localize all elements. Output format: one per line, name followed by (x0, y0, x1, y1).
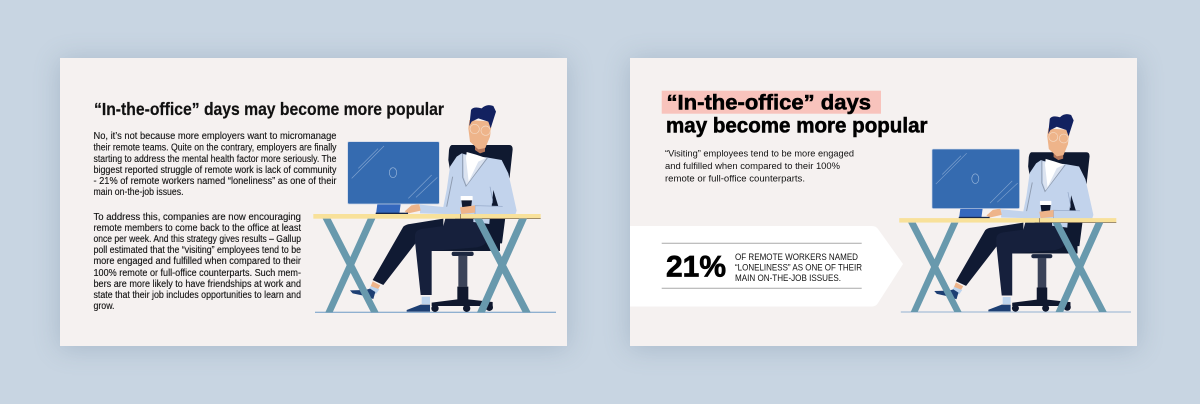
text block: and fulfilled when compared to their 100% (665, 161, 840, 172)
head (468, 105, 496, 153)
callout: 21% statistic (630, 226, 903, 306)
jacket (420, 153, 517, 224)
desk top (899, 218, 1116, 223)
heading: “In-the-office” days may become more popular (94, 99, 444, 119)
jacket (1001, 160, 1093, 228)
text block: second paragraph: poll estimated that the “visiting” employees tend to be (94, 245, 301, 256)
illustration: man at desk (899, 114, 1131, 313)
text block: second paragraph: once per week. And this strategy gives results – Gallup (94, 234, 301, 245)
hand on keyboard (405, 204, 421, 213)
text block (665, 149, 854, 185)
hand on keyboard (986, 209, 1002, 217)
text block: second paragraph: more engaged and fulfilled when compared to their (94, 256, 302, 267)
text block: “Visiting” employees tend to be more engaged (665, 149, 854, 160)
text block: first paragraph: No, it’s not because more employers want to micromanage (94, 131, 336, 142)
text block: second paragraph: remote members to come back to the office at least (94, 223, 301, 234)
callout text (735, 252, 862, 284)
big number: 21% (666, 251, 726, 284)
text block: second paragraph: 100% remote or full-office counterparts. Such mem- (94, 268, 301, 279)
heading: may become more popular (666, 114, 928, 138)
coffee cup in hand (460, 196, 475, 214)
text block: first paragraph: main on-the-job issues. (94, 187, 184, 198)
illustration: man at desk (313, 105, 556, 313)
text block: remote or full-office counterparts. (665, 174, 805, 185)
text block: first paragraph: their remote teams. Quite on the contrary, employers are finally (94, 142, 337, 154)
callout text: MAIN ON-THE-JOB ISSUES. (735, 273, 841, 284)
monitor (348, 142, 439, 215)
office chair (1011, 152, 1090, 312)
heading highlight (662, 91, 881, 114)
text block: second paragraph: grow. (94, 301, 114, 312)
floor line (315, 312, 556, 313)
shoes and socks (350, 281, 430, 312)
callout text: “LONELINESS” AS ONE OF THEIR (735, 263, 862, 274)
panel: short text version (630, 58, 1137, 346)
trousers (373, 219, 487, 295)
monitor (932, 149, 1020, 219)
trousers (956, 223, 1065, 295)
callout text: OF REMOTE WORKERS NAMED (735, 252, 858, 263)
text block: first paragraph: - 21% of remote workers named “loneliness” as one of their (94, 176, 337, 187)
text block: first paragraph (94, 131, 337, 198)
head (1047, 114, 1074, 160)
text block: first paragraph: starting to address the mental health factor more seriously. The (94, 154, 336, 165)
shoes and socks (934, 282, 1011, 311)
text block: first paragraph: biggest reported struggle of remote work is lack of community (94, 165, 337, 176)
text block: second paragraph (94, 212, 302, 312)
desk legs (323, 219, 531, 312)
office chair (430, 145, 513, 312)
text block: second paragraph: To address this, companies are now encouraging (94, 212, 301, 223)
shirt (1042, 159, 1065, 190)
heading: “In-the-office” days (666, 90, 871, 114)
floor line (901, 311, 1131, 313)
text block: second paragraph: state that their job includes opportunities to learn and (94, 290, 301, 301)
heading (666, 90, 928, 138)
desk top (313, 214, 541, 219)
panel: long text version (60, 58, 567, 346)
shirt (463, 152, 487, 185)
text block: second paragraph: bers are more likely to have friendships at work and (94, 279, 301, 290)
coffee cup in hand (1039, 201, 1054, 218)
desk legs (908, 223, 1107, 312)
